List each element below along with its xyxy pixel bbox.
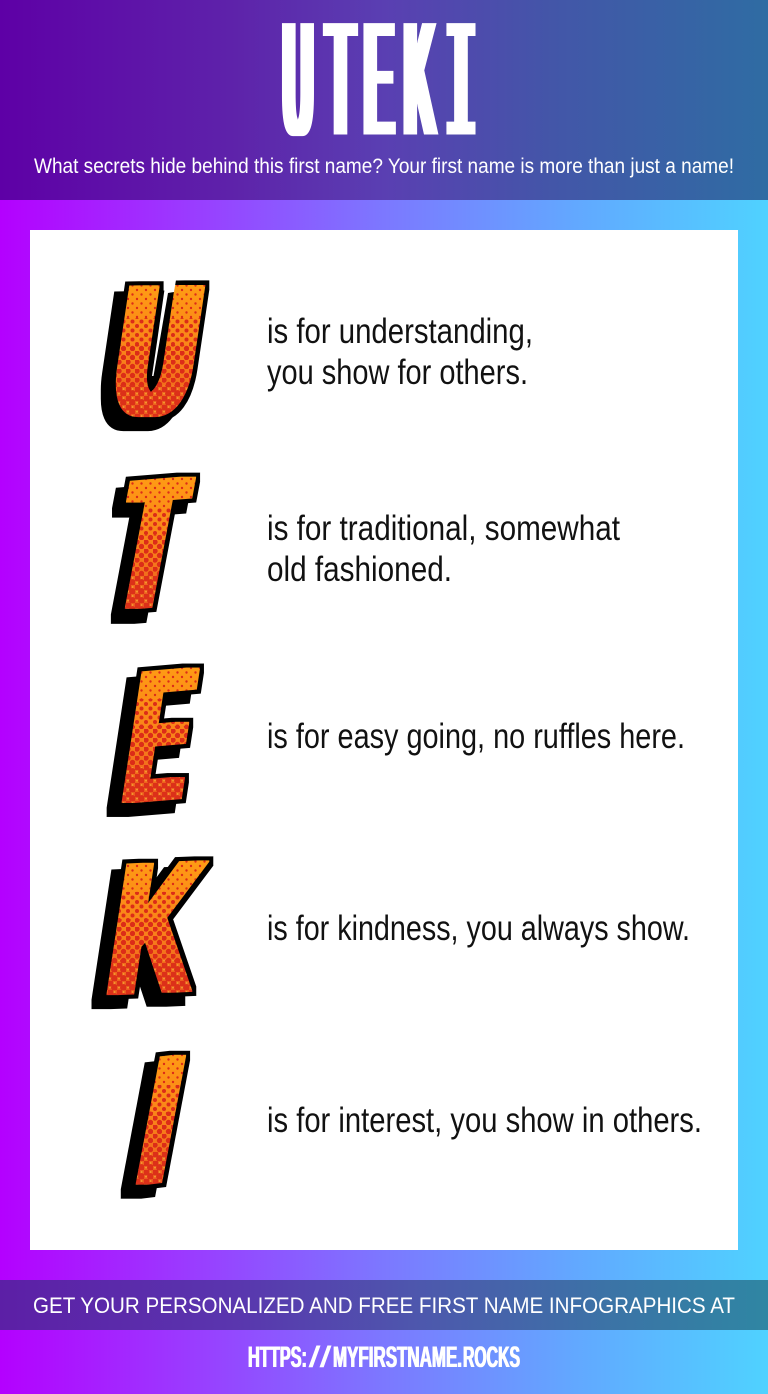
icon: comic letter I: I xyxy=(117,1024,184,1234)
row U xyxy=(100,280,530,432)
icon: comic letter T: T xyxy=(94,449,187,661)
white content panel xyxy=(30,230,738,1250)
footer url: ROCKS xyxy=(463,1341,520,1374)
footer url: MYFIRSTNAME. xyxy=(333,1341,462,1374)
title: UTEKI xyxy=(283,0,476,186)
icon: comic letter T xyxy=(110,472,200,624)
icon: comic letter I xyxy=(120,1050,190,1199)
icon: comic letter E xyxy=(106,664,204,817)
text: U meaning: you show for others. xyxy=(267,353,528,392)
icon: comic letter U: U xyxy=(106,246,209,456)
row I xyxy=(120,1050,700,1199)
footer band xyxy=(0,1280,768,1330)
icon: comic letter U: U xyxy=(95,256,198,466)
footer url: // xyxy=(309,1341,332,1374)
row T xyxy=(90,438,620,661)
footer url: HTTPS: xyxy=(248,1341,307,1374)
header band xyxy=(0,0,768,200)
text: K meaning: is for kindness, you always show. xyxy=(267,909,690,948)
icon: comic letter T: T xyxy=(104,438,197,650)
icon: comic letter K: K xyxy=(98,819,214,1036)
icon: comic letter I: I xyxy=(128,1014,195,1224)
icon: comic letter K xyxy=(92,856,214,1010)
text: T meaning: old fashioned. xyxy=(267,550,452,589)
row E xyxy=(90,628,685,854)
text: T meaning: is for traditional, somewhat xyxy=(267,509,620,548)
icon: comic letter E: E xyxy=(105,638,194,854)
icon: comic letter K: K xyxy=(87,829,203,1046)
icon: comic letter U xyxy=(100,280,210,432)
row K xyxy=(87,819,690,1046)
text: U meaning: is for understanding, xyxy=(267,312,533,351)
icon: comic letter E: E xyxy=(116,628,205,844)
text: E meaning: is for easy going, no ruffles here. xyxy=(267,717,685,756)
footer url xyxy=(248,1341,520,1374)
